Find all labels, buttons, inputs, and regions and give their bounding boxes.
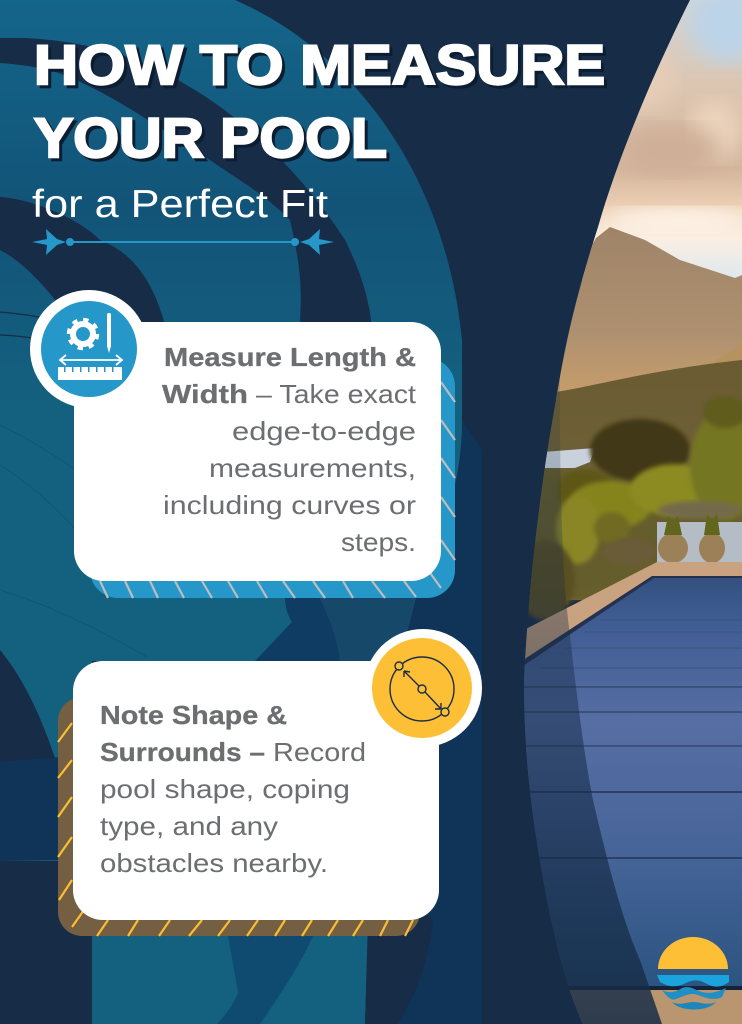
card text: Surrounds – <box>100 737 265 767</box>
striped card backing <box>58 697 420 936</box>
title: HOW TO MEASURE <box>34 33 605 96</box>
subtitle: for a Perfect Fit <box>32 183 328 226</box>
near deck <box>568 986 742 1024</box>
card text: measurements, <box>209 453 416 483</box>
panel: note shape and surrounds <box>58 629 482 936</box>
card text: Width <box>162 379 248 409</box>
pool water <box>520 578 742 988</box>
card text: including curves or <box>163 490 416 520</box>
icon: gear, pencil and ruler <box>30 290 148 408</box>
card text <box>100 700 366 878</box>
icon: circle diameter <box>364 629 482 747</box>
white card <box>73 661 439 920</box>
photo: mountain and pool <box>515 0 742 1024</box>
card text: steps. <box>341 527 416 557</box>
title <box>34 33 605 169</box>
white card <box>74 322 441 581</box>
shrubs <box>515 396 742 620</box>
title: YOUR POOL <box>34 106 387 169</box>
translucent curved band <box>520 380 662 1024</box>
wall and pots <box>657 514 742 563</box>
card text: Record <box>273 737 366 767</box>
striped card backing <box>90 358 455 598</box>
card text: pool shape, coping <box>100 774 350 804</box>
building <box>543 448 595 468</box>
card text: Note Shape & <box>100 700 287 730</box>
card text <box>162 342 417 557</box>
card text: edge-to-edge <box>232 416 416 446</box>
card text: obstacles nearby. <box>100 848 328 878</box>
pool deck <box>520 562 742 664</box>
card text: Measure Length & <box>164 342 416 372</box>
card text: – Take exact <box>256 379 417 409</box>
background swirl shapes <box>0 0 482 1024</box>
decorative arrow divider <box>32 229 334 255</box>
card text: type, and any <box>100 811 278 841</box>
logo: sun and waves <box>657 937 729 1010</box>
panel: measure length and width <box>30 290 455 598</box>
